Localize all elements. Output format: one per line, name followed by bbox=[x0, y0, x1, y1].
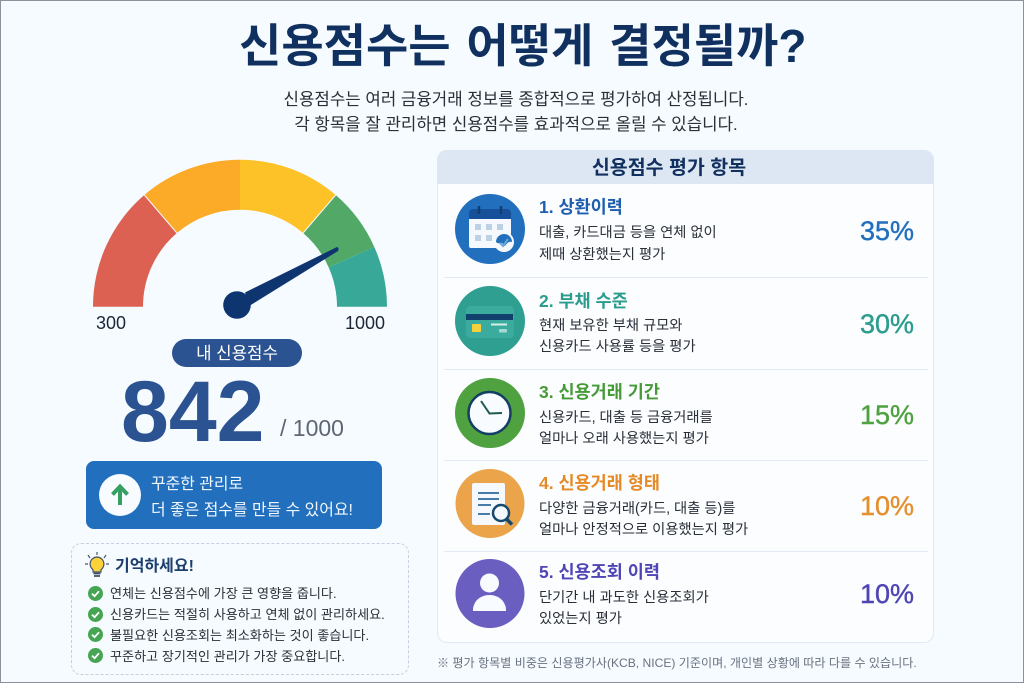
tip 3 text: 불필요한 신용조회는 최소화하는 것이 좋습니다. bbox=[110, 628, 369, 642]
gauge segment: green bbox=[303, 195, 374, 267]
tip 1 check bbox=[88, 586, 103, 601]
subtitle: 신용점수는 여러 금융거래 정보를 종합적으로 평가하여 산정됩니다. bbox=[284, 90, 748, 108]
icon: person bbox=[456, 559, 524, 628]
item 3 description bbox=[539, 410, 713, 446]
tip 2 check bbox=[88, 607, 103, 622]
gauge segment: teal bbox=[329, 247, 387, 307]
item 1 percent: 35% bbox=[860, 216, 914, 246]
item 4 heading: 4. 신용거래 형태 bbox=[539, 473, 660, 493]
tip 1 text: 연체는 신용점수에 가장 큰 영향을 줍니다. bbox=[110, 586, 337, 601]
item 5 description: 단기간 내 과도한 신용조회가 bbox=[539, 590, 709, 606]
tip 3 check bbox=[88, 627, 103, 642]
gauge chart bbox=[93, 160, 387, 333]
tip 4 check bbox=[88, 648, 103, 663]
scale label: 1000: 1000 bbox=[345, 313, 385, 333]
item 2 description: 신용카드 사용률 등을 평가 bbox=[539, 339, 696, 355]
tip 2 text: 신용카드는 적절히 사용하고 연체 없이 관리하세요. bbox=[110, 607, 385, 622]
icon: light bulb bbox=[85, 552, 109, 577]
panel header: 신용점수 평가 항목 bbox=[592, 157, 746, 179]
tips heading: 기억하세요! bbox=[115, 558, 194, 575]
item 5 description: 있었는지 평가 bbox=[539, 610, 622, 626]
icon: clock bbox=[455, 378, 525, 448]
callout text bbox=[151, 476, 353, 518]
item 2 description bbox=[539, 318, 696, 355]
item 5 description bbox=[539, 590, 709, 626]
icon: up arrow bbox=[99, 474, 141, 516]
item 1 description: 대출, 카드대금 등을 연체 없이 bbox=[539, 225, 717, 241]
footnote: ※ 평가 항목별 비중은 신용평가사(KCB, NICE) 기준이며, 개인별 상황에 따라 다를 수 있습니다. bbox=[437, 656, 917, 670]
callout: steady management bbox=[86, 461, 382, 529]
gauge segment: red bbox=[93, 195, 177, 307]
icon: calendar bbox=[455, 194, 525, 264]
scale label: 300: 300 bbox=[96, 313, 126, 333]
item 5 percent: 10% bbox=[860, 579, 914, 609]
gauge segment: orange bbox=[144, 160, 240, 233]
item 4 description: 다양한 금융거래(카드, 대출 등)를 bbox=[539, 500, 735, 516]
icon: document search bbox=[456, 469, 524, 538]
gauge segment: yellow bbox=[240, 160, 336, 233]
item 2 description: 현재 보유한 부채 규모와 bbox=[539, 318, 682, 334]
tip 4 text: 꾸준하고 장기적인 관리가 가장 중요합니다. bbox=[110, 648, 345, 664]
item 3 description: 얼마나 오래 사용했는지 평가 bbox=[539, 430, 709, 446]
item 1 description: 제때 상환했는지 평가 bbox=[539, 247, 665, 263]
score maximum: / 1000 bbox=[280, 415, 344, 441]
item 3 percent: 15% bbox=[860, 400, 914, 430]
score value: 842 bbox=[121, 364, 264, 460]
panel: evaluation items bbox=[437, 150, 934, 643]
item 1 description bbox=[539, 224, 717, 263]
item 5 heading: 5. 신용조회 이력 bbox=[539, 562, 660, 582]
callout text: 더 좋은 점수를 만들 수 있어요! bbox=[151, 502, 353, 518]
item 1 heading: 1. 상환이력 bbox=[539, 197, 623, 217]
icon: credit card bbox=[455, 286, 525, 356]
panel header bbox=[437, 150, 934, 184]
item 3 description: 신용카드, 대출 등 금융거래를 bbox=[539, 410, 713, 426]
item 4 description: 얼마나 안정적으로 이용했는지 평가 bbox=[539, 522, 748, 538]
badge: my credit score: 내 신용점수 bbox=[196, 344, 278, 363]
panel: remember tips bbox=[71, 543, 409, 675]
item 4 percent: 10% bbox=[860, 491, 914, 521]
item 4 description bbox=[539, 500, 748, 538]
gauge needle bbox=[223, 247, 339, 319]
subtitle bbox=[284, 90, 748, 134]
item 2 heading: 2. 부채 수준 bbox=[539, 291, 628, 311]
item 2 percent: 30% bbox=[860, 309, 914, 339]
title: 신용점수는 어떻게 결정될까? bbox=[239, 20, 806, 72]
callout text: 꾸준한 관리로 bbox=[151, 476, 243, 493]
item 3 heading: 3. 신용거래 기간 bbox=[539, 382, 660, 402]
badge: my credit score bbox=[172, 339, 302, 367]
subtitle: 각 항목을 잘 관리하면 신용점수를 효과적으로 올릴 수 있습니다. bbox=[294, 115, 738, 134]
